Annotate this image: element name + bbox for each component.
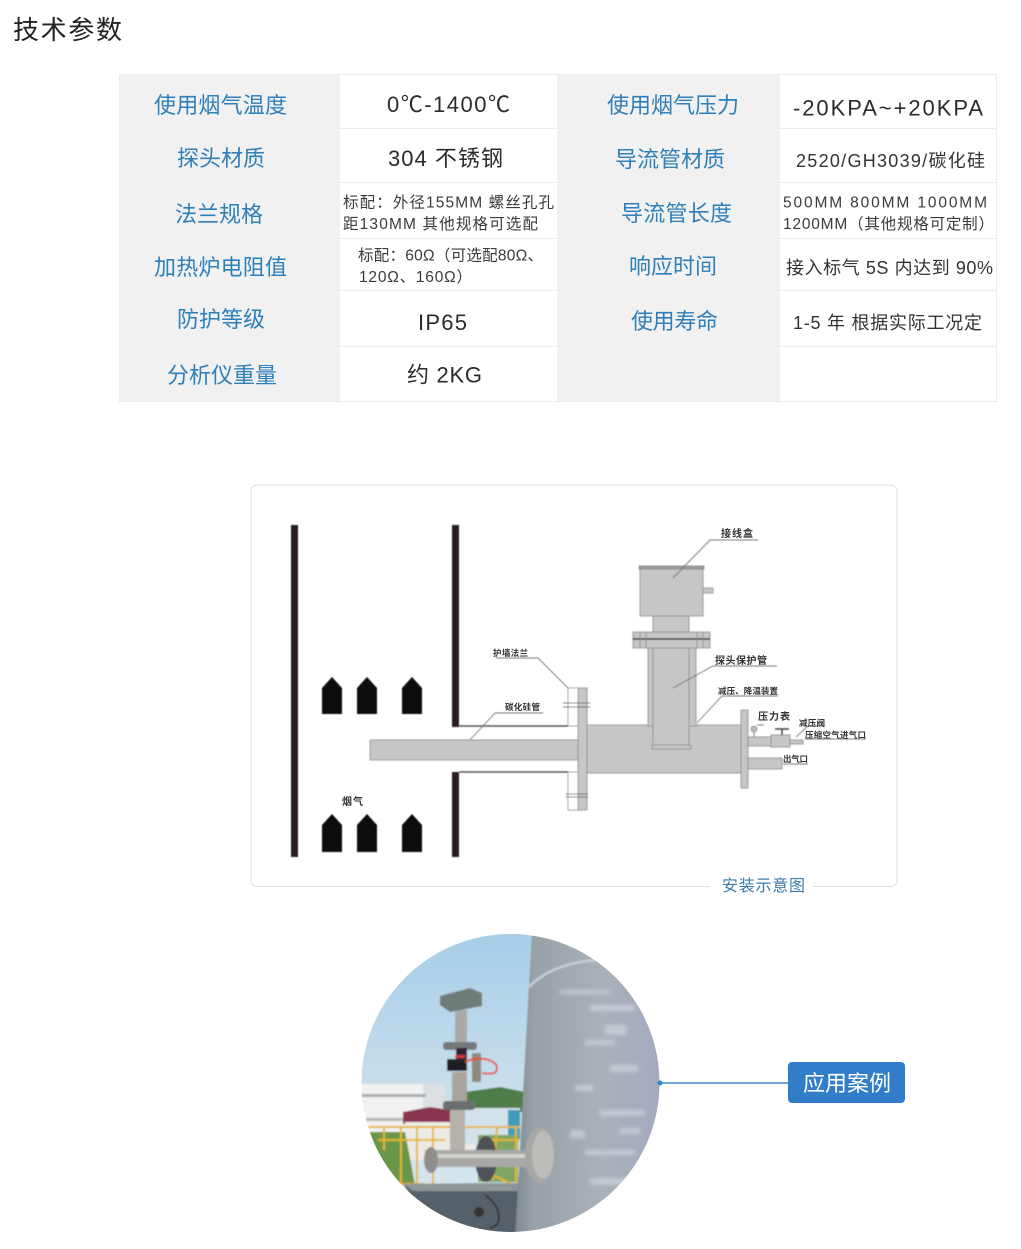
roof deck <box>403 1183 518 1232</box>
diagram labels: 减压阀 <box>799 718 825 728</box>
row: flue gas temperature <box>154 92 983 120</box>
flue gas arrows <box>322 677 422 852</box>
flue walls <box>291 525 459 857</box>
row: analyzer weight <box>167 362 482 388</box>
application case button <box>788 1062 905 1103</box>
row: flue gas temperature: 使用烟气温度 <box>154 93 287 118</box>
application case button: 应用案例 <box>803 1071 891 1096</box>
probe assembly <box>370 566 803 810</box>
row: flange specification: 法兰规格 <box>175 202 263 227</box>
row: heater resistance: 120Ω、160Ω） <box>359 269 472 286</box>
row: heater resistance <box>154 246 993 286</box>
background hill and buildings <box>355 1084 525 1185</box>
diagram labels: 碳化硅管 <box>505 702 540 712</box>
row: probe material: 304 不锈钢 <box>388 146 503 171</box>
panel: installation diagram <box>251 485 897 895</box>
diagram labels: 压缩空气进气口 <box>805 730 866 740</box>
row: flange specification: 1200MM（其他规格可定制） <box>783 215 994 233</box>
row: flange specification <box>175 194 994 233</box>
diagram labels <box>342 527 866 808</box>
row: flue gas temperature: 使用烟气压力 <box>607 93 739 118</box>
diagram labels: 护墙法兰 <box>493 648 528 658</box>
row: flange specification: 导流管长度 <box>621 201 732 226</box>
diagram labels: 出气口 <box>783 754 808 764</box>
application photo <box>355 930 670 1240</box>
row: analyzer weight: 约 2KG <box>407 362 482 388</box>
leader lines <box>470 540 866 764</box>
row: probe material: 探头材质 <box>177 146 265 171</box>
row: flange specification: 距130MM 其他规格可选配 <box>343 215 538 233</box>
row: probe material <box>177 146 985 172</box>
diagram labels: 减压、降温装置 <box>718 686 778 696</box>
row: protection class <box>177 307 982 335</box>
row: flue gas temperature: -20KPA~+20KPA <box>793 96 983 120</box>
row: protection class: IP65 <box>418 310 467 335</box>
row: heater resistance: 标配：60Ω（可选配80Ω、 <box>358 246 543 264</box>
probe installed <box>424 988 555 1183</box>
row: flue gas temperature: 0℃-1400℃ <box>387 92 510 117</box>
row: protection class: 使用寿命 <box>631 309 718 334</box>
row: protection class: 1-5 年 根据实际工况定 <box>793 313 982 333</box>
diagram labels: 压力表 <box>758 710 790 723</box>
row: heater resistance: 接入标气 5S 内达到 90% <box>786 258 993 278</box>
panel: parameter table <box>120 74 996 402</box>
diagram labels: 接线盒 <box>721 527 753 540</box>
row: flange specification: 标配：外径155MM 螺丝孔孔 <box>343 194 554 212</box>
row: analyzer weight: 分析仪重量 <box>167 363 277 388</box>
row: heater resistance: 响应时间 <box>629 254 717 279</box>
caption: 安装示意图 <box>722 876 805 895</box>
diagram labels: 烟气 <box>342 795 363 808</box>
connector line <box>658 1080 790 1086</box>
yellow railing <box>368 1127 520 1188</box>
row: flange specification: 500MM 800MM 1000MM <box>783 194 987 212</box>
row: protection class: 防护等级 <box>177 307 265 332</box>
row: heater resistance: 加热炉电阻值 <box>154 255 287 280</box>
row: probe material: 导流管材质 <box>615 147 725 172</box>
flue stack <box>514 936 660 1232</box>
row: probe material: 2520/GH3039/碳化硅 <box>796 151 985 171</box>
title: 技术参数 <box>13 15 122 45</box>
diagram labels: 探头保护管 <box>715 654 767 667</box>
